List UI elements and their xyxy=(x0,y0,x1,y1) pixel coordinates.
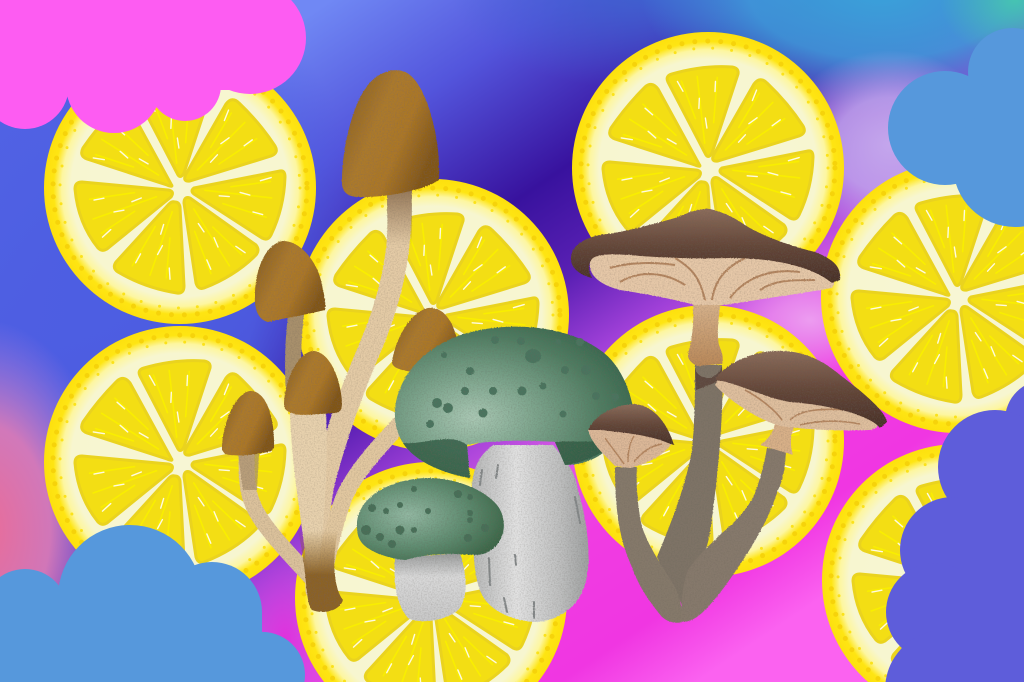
mushroom cap 1 xyxy=(342,70,439,197)
lemon slice 8 xyxy=(822,444,1024,682)
lemon slice 3 xyxy=(572,32,844,304)
stem base xyxy=(298,530,343,612)
mushroom cap 2 xyxy=(255,241,325,322)
lemon slice 5 xyxy=(44,326,316,598)
neck of large mushroom xyxy=(688,300,723,366)
lemon slice 7 xyxy=(295,462,567,682)
cloud: pink top left xyxy=(0,0,306,133)
ochre mushroom cluster xyxy=(222,70,458,612)
left brown cap underside xyxy=(588,430,672,468)
mushroom cap 3 xyxy=(284,351,342,415)
left brown cap top xyxy=(588,404,674,445)
stems xyxy=(247,195,402,590)
right brown cap underside xyxy=(715,379,878,430)
large green mushroom xyxy=(395,327,632,622)
small green mushroom xyxy=(357,478,504,621)
cloud: blue top right xyxy=(888,28,1024,227)
cloud: violet bottom right xyxy=(886,380,1024,682)
large brown cap underside xyxy=(590,254,834,305)
right stem xyxy=(681,448,786,622)
mushroom cap 4 xyxy=(222,391,274,455)
lemon slice 4 xyxy=(821,161,1024,433)
lemon slice 2 xyxy=(297,179,569,451)
center stem xyxy=(657,365,723,605)
cloud: blue bottom left xyxy=(0,525,305,682)
lemon slice 6 xyxy=(572,305,844,577)
brown mushroom group xyxy=(571,209,887,623)
large brown cap top xyxy=(571,209,840,283)
left stem xyxy=(615,467,682,623)
lemon slice 1 xyxy=(44,52,316,324)
mushroom cap 5 xyxy=(392,308,458,372)
neck of right mushroom xyxy=(760,420,795,455)
right brown cap top xyxy=(716,351,887,428)
